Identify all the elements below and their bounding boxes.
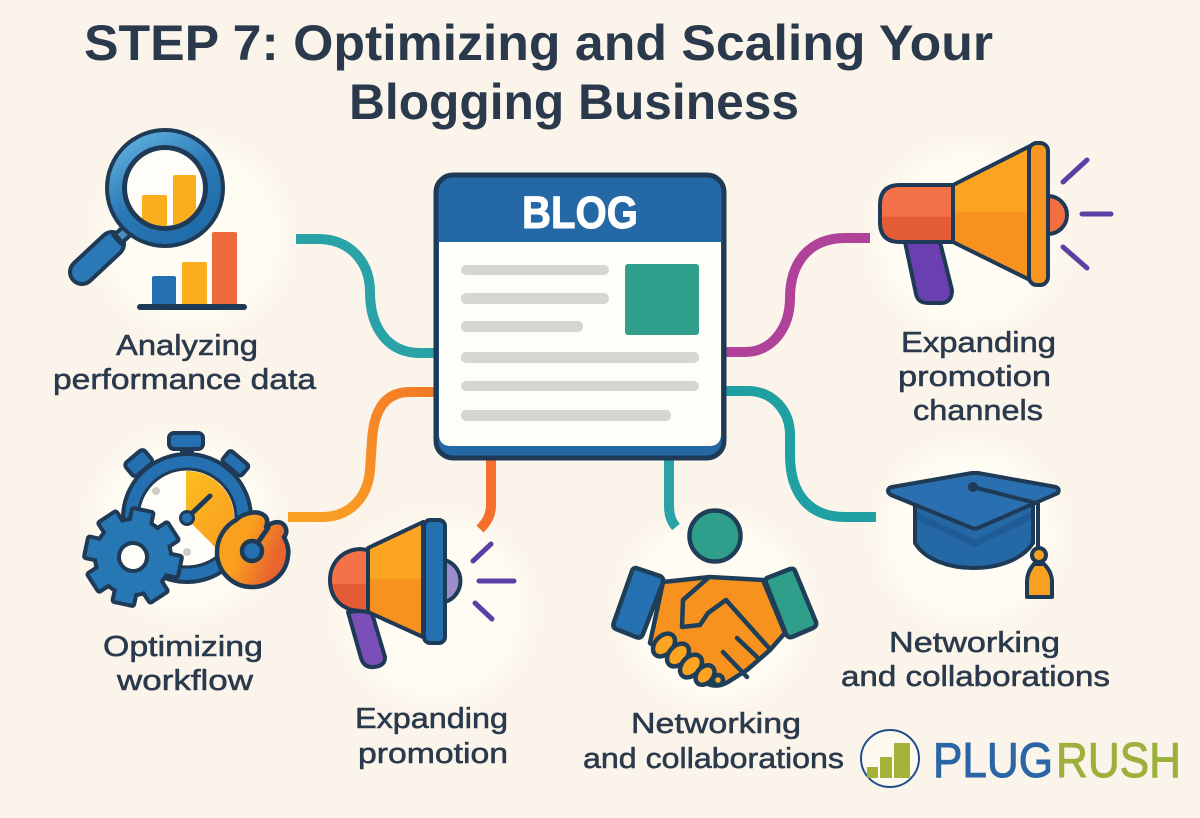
icon: stopwatch xyxy=(123,433,251,582)
icon: orange gear xyxy=(217,512,288,587)
title: Blogging Business xyxy=(349,74,799,130)
connector: promotion to blog xyxy=(480,455,491,529)
icon: megaphone xyxy=(880,143,1111,303)
panel: networking and collaborations (graduation cap) xyxy=(841,473,1110,693)
panel: expanding promotion channels xyxy=(880,143,1111,427)
icon: handshake xyxy=(613,568,816,689)
card body xyxy=(436,175,724,458)
icon: blue gear xyxy=(78,502,188,612)
connector: analyzing to blog xyxy=(296,239,438,353)
connector: collaborations to blog xyxy=(669,455,676,527)
label xyxy=(355,703,508,770)
label: Expanding xyxy=(901,327,1056,359)
icon: graduation cap xyxy=(888,473,1059,597)
icon: bar chart xyxy=(137,232,247,310)
logo mark xyxy=(861,730,919,787)
label: Networking xyxy=(631,708,801,740)
label xyxy=(53,330,317,396)
icon: megaphone xyxy=(330,520,514,667)
icon: person head xyxy=(690,510,740,562)
panel: analyzing performance data xyxy=(53,128,317,396)
panel: blog card xyxy=(436,175,724,458)
label: Networking xyxy=(889,627,1060,659)
connector: networking to blog xyxy=(722,391,876,517)
label: Analyzing xyxy=(116,330,258,362)
label xyxy=(103,631,263,697)
connector: workflow to blog xyxy=(288,392,438,517)
label: and collaborations xyxy=(583,743,844,775)
label: workflow xyxy=(116,665,254,697)
card page xyxy=(439,242,721,446)
panel: optimizing workflow xyxy=(78,433,288,697)
label: and collaborations xyxy=(841,661,1110,693)
label: performance data xyxy=(53,364,317,396)
connector: channels to blog xyxy=(722,238,870,352)
panel: expanding promotion xyxy=(330,520,514,770)
label xyxy=(841,627,1110,693)
panel: networking and collaborations (handshake) xyxy=(583,510,844,775)
title xyxy=(84,15,993,130)
text lines xyxy=(461,265,699,421)
label: channels xyxy=(913,395,1043,427)
icon glows xyxy=(80,129,1076,718)
label: Optimizing xyxy=(103,631,263,663)
logo wordmark: RUSH xyxy=(1056,734,1181,788)
image placeholder xyxy=(625,264,699,335)
label xyxy=(583,708,844,775)
title: STEP 7: Optimizing and Scaling Your xyxy=(84,15,993,71)
icon: magnifier xyxy=(82,128,225,272)
logo: plugrush xyxy=(861,730,1181,788)
blog heading: BLOG xyxy=(522,187,638,238)
label: Expanding xyxy=(355,703,508,735)
label xyxy=(898,327,1056,427)
label: promotion xyxy=(898,361,1051,393)
label: promotion xyxy=(358,738,508,770)
logo wordmark: PLUG xyxy=(933,734,1053,788)
logo wordmark xyxy=(933,734,1181,788)
